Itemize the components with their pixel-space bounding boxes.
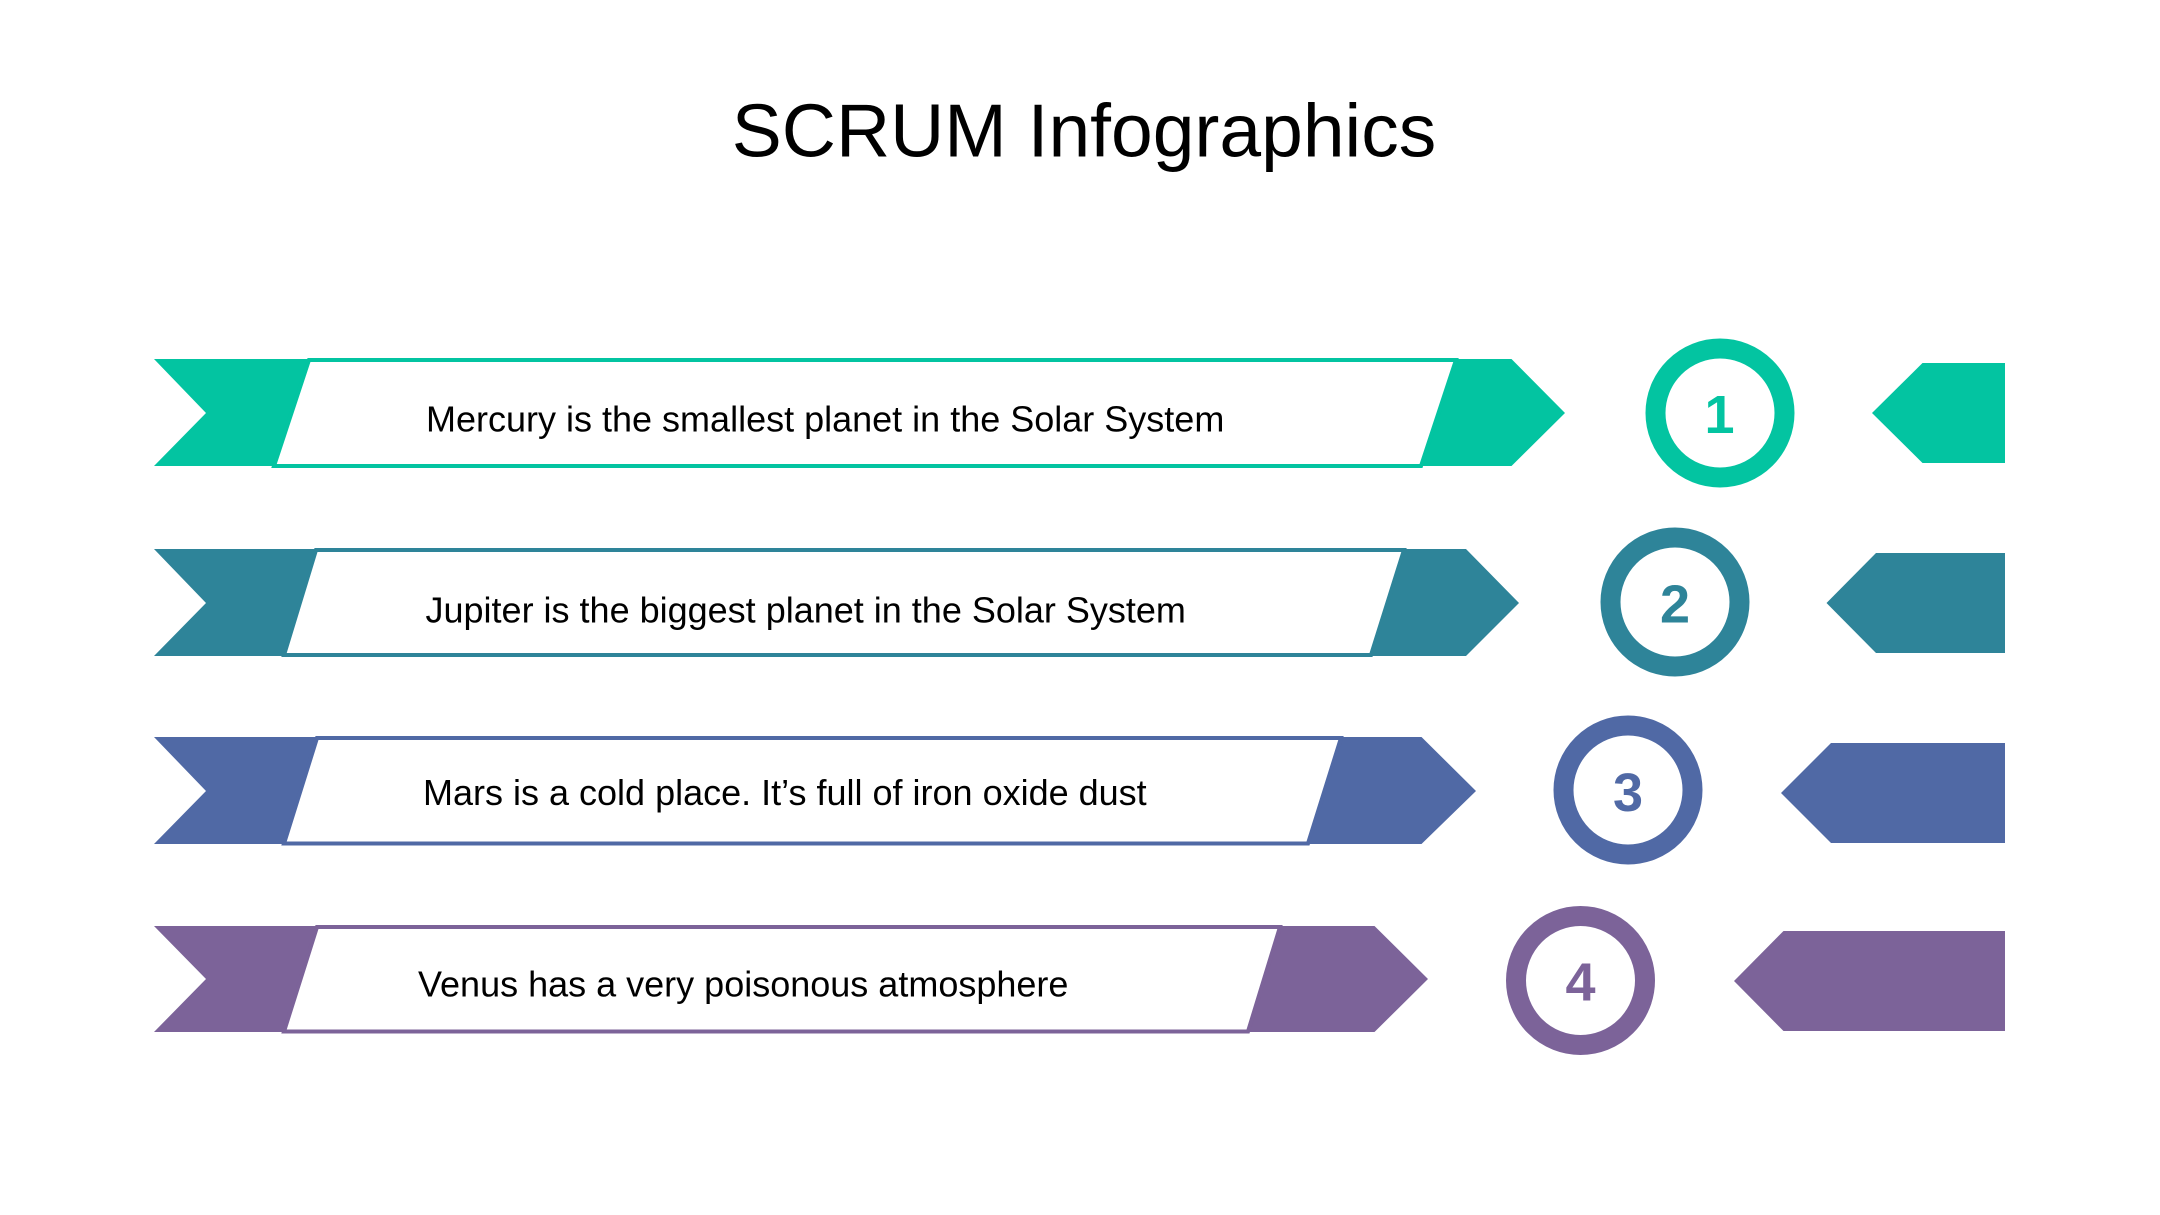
ribbon 1: Mercury is the smallest planet in the Solar System — [426, 398, 1224, 440]
tag 2 — [1826, 553, 2005, 653]
row 2: Jupiter — [154, 538, 2005, 666]
number badge 4: 4 — [1565, 952, 1596, 1012]
ribbon 4: Venus has a very poisonous atmosphere — [418, 964, 1068, 1005]
ribbon 3: Mars is a cold place. It’s full of iron oxide dust — [423, 772, 1147, 813]
row 1: Mercury — [154, 348, 2005, 478]
row 4: Venus — [154, 916, 2005, 1045]
tag 1 — [1872, 363, 2005, 463]
ribbon 3 — [154, 737, 1476, 844]
ribbon 2: Jupiter is the biggest planet in the Solar System — [426, 590, 1186, 631]
tag 4 — [1734, 931, 2005, 1031]
number badge 3 — [1564, 726, 1692, 854]
ribbon 1 — [154, 359, 1565, 466]
row 3: Mars — [154, 726, 2005, 854]
title: SCRUM Infographics — [732, 88, 1436, 172]
ribbon 4 — [154, 926, 1428, 1032]
number badge 3: 3 — [1613, 763, 1643, 823]
number badge 2 — [1610, 538, 1740, 666]
ribbon 2 — [154, 549, 1519, 656]
number badge 2: 2 — [1660, 574, 1690, 634]
number badge 1: 1 — [1704, 385, 1735, 445]
number badge 1 — [1656, 348, 1784, 478]
number badge 4 — [1516, 916, 1645, 1045]
tag 3 — [1781, 743, 2005, 843]
